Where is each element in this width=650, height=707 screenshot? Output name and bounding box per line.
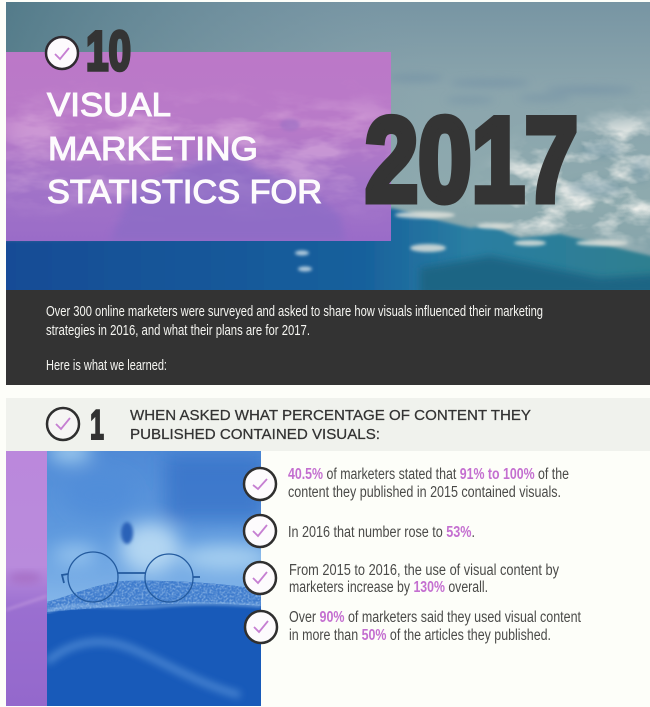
hero panel: mountain photo background <box>0 2 650 296</box>
title year: 2017: 2017 <box>365 93 578 227</box>
icon: bullet check 4 <box>245 611 277 643</box>
intro text: strategies in 2016, and what their plans are for 2017. <box>46 322 310 339</box>
intro text <box>46 303 543 374</box>
bullet text 1: 40.5% of marketers stated that 91% to 100% of the <box>288 466 569 483</box>
section heading: WHEN ASKED WHAT PERCENTAGE OF CONTENT THEY <box>130 408 531 424</box>
bullet text 3: From 2015 to 2016, the use of visual content by <box>289 562 559 579</box>
section heading <box>130 408 531 443</box>
bullet 3 <box>244 562 559 596</box>
title: visual marketing statistics for: MARKETING <box>48 130 258 167</box>
fabric <box>47 581 261 706</box>
icon: title check mark <box>46 37 78 69</box>
bullet text 1 <box>288 466 569 501</box>
bullet text 1: content they published in 2015 contained visuals. <box>288 484 561 501</box>
bullet 2 <box>244 515 475 547</box>
section heading: PUBLISHED CONTAINED VISUALS: <box>130 427 380 443</box>
section 1 header band <box>6 398 650 451</box>
hero panel: purple overlay <box>6 52 391 241</box>
section 1 photo: glasses on fabric <box>6 442 270 706</box>
bullet text 4: in more than 50% of the articles they published. <box>289 627 551 644</box>
intro panel <box>6 290 650 385</box>
section number: 1: 1 <box>90 401 104 448</box>
bullet text 4: Over 90% of marketers said they used visual content <box>289 609 582 626</box>
icon: round glasses <box>62 552 200 602</box>
bullet 4 <box>245 609 582 644</box>
bullet text 3: marketers increase by 130% overall. <box>289 579 488 596</box>
title: visual marketing statistics for <box>47 86 322 210</box>
mountains <box>0 208 650 296</box>
icon: bullet check 3 <box>244 562 276 594</box>
bullet text 2: In 2016 that number rose to 53%. <box>288 524 475 541</box>
bullet 1 <box>244 466 569 501</box>
icon: bullet check 1 <box>244 468 276 500</box>
icon: bullet check 2 <box>244 515 276 547</box>
intro text: Here is what we learned: <box>46 357 167 374</box>
bullet text 4 <box>289 609 582 644</box>
title: visual marketing statistics for: STATISTICS FOR <box>47 173 322 210</box>
title: visual marketing statistics for: VISUAL <box>47 86 171 123</box>
bullet text 3 <box>289 562 559 596</box>
title number: 10: 10 <box>86 19 131 82</box>
icon: section check mark <box>47 408 79 440</box>
